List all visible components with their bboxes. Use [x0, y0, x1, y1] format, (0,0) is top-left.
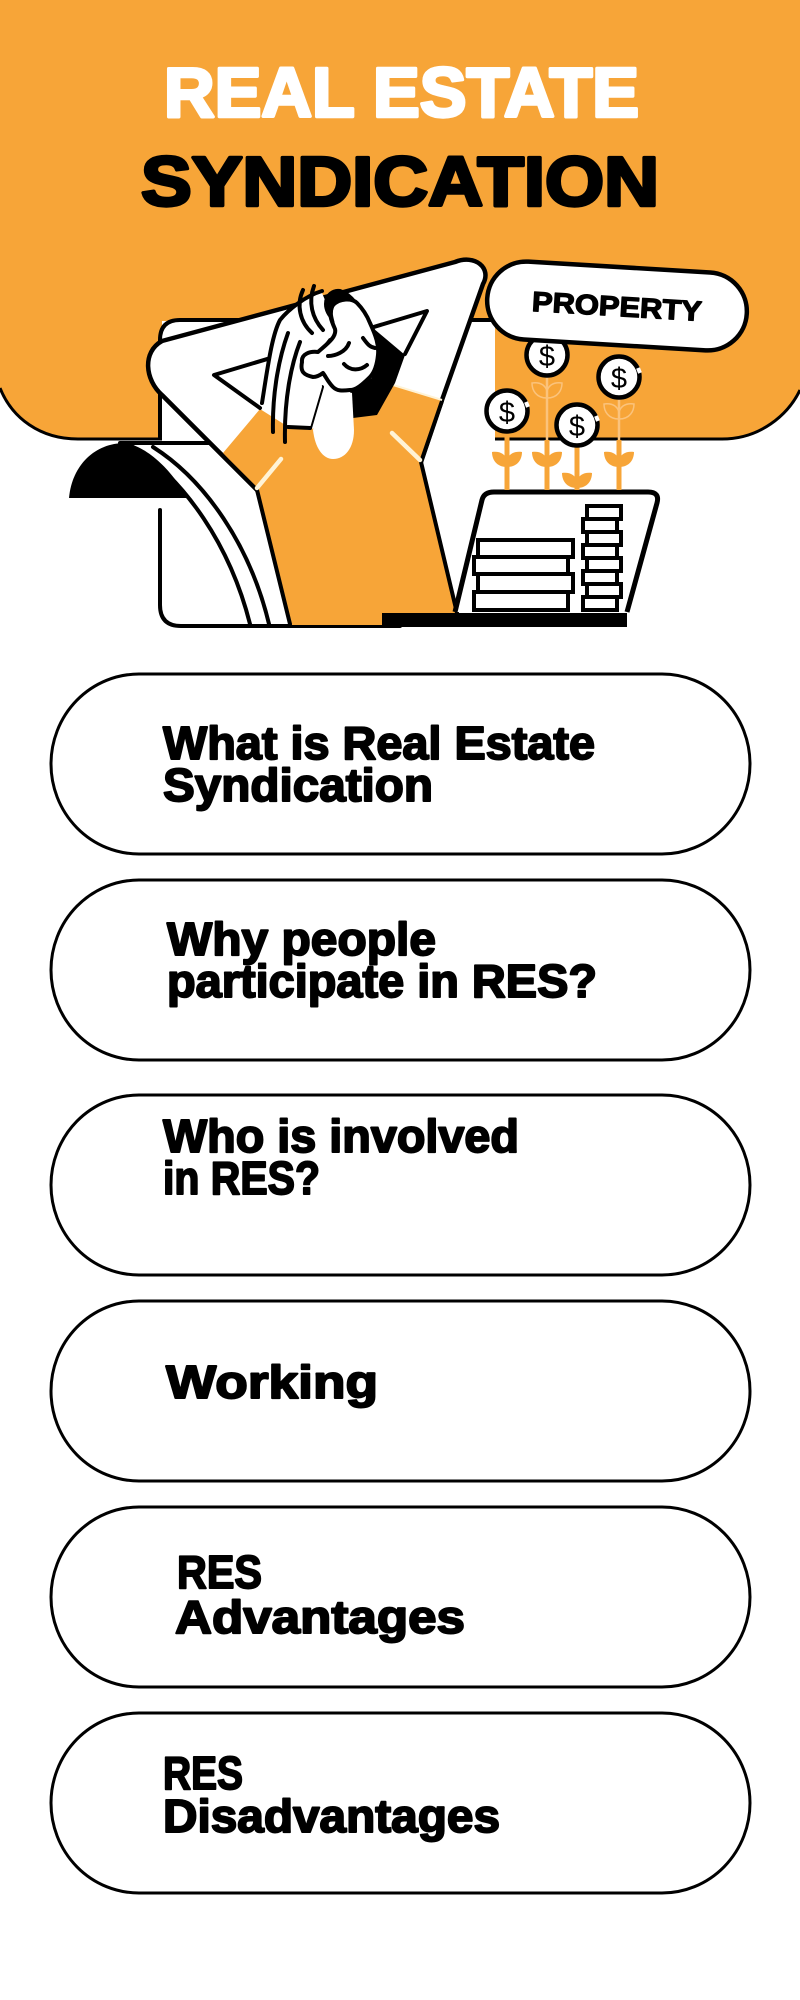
property badge: PROPERTY — [531, 286, 703, 327]
pill: why people participate: participate in RES? — [167, 955, 597, 1007]
inner arm triangle — [214, 311, 427, 408]
pill: res disadvantages — [51, 1713, 750, 1893]
pill: working: Working — [166, 1356, 378, 1408]
pill: res advantages: Advantages — [175, 1591, 465, 1643]
hair strands — [262, 293, 333, 428]
shirt creases — [257, 433, 420, 488]
chair back — [160, 320, 495, 626]
title: real estate: REAL ESTATE — [164, 54, 639, 132]
coin stack large — [474, 540, 573, 610]
chair arm — [69, 443, 269, 624]
head and face — [301, 299, 378, 391]
pill: who is involved — [51, 1095, 750, 1275]
coins with dollar signs — [486, 334, 640, 446]
title: syndication: SYNDICATION — [141, 142, 659, 220]
laptop — [382, 492, 658, 627]
coins with dollar signs: $ — [539, 341, 555, 373]
coin stack small — [583, 506, 621, 610]
pill: what is real estate syndication: Syndication — [163, 759, 433, 811]
arms — [148, 260, 485, 490]
pill: who is involved: in RES? — [163, 1152, 320, 1204]
pill: what is real estate syndication: What is Real Estate — [163, 717, 595, 769]
property badge — [485, 259, 749, 353]
person — [148, 260, 485, 625]
pill: res advantages — [51, 1507, 750, 1687]
coins with dollar signs: $ — [611, 363, 627, 395]
pill: res disadvantages: RES — [163, 1747, 243, 1799]
money plants — [492, 376, 634, 490]
pill: res advantages: RES — [177, 1546, 262, 1598]
shirt — [223, 385, 457, 625]
neck — [313, 385, 354, 459]
header background — [0, 0, 800, 439]
pill: res disadvantages: Disadvantages — [163, 1790, 500, 1842]
pill: what is real estate syndication — [51, 674, 750, 854]
coins with dollar signs: $ — [499, 397, 515, 429]
pill: working — [51, 1301, 750, 1481]
illustration: person relaxing in chair with money plants — [69, 260, 658, 627]
pill: why people participate — [51, 880, 750, 1060]
pill: who is involved: Who is involved — [163, 1110, 519, 1162]
pill: why people participate: Why people — [167, 913, 436, 965]
coins with dollar signs: $ — [569, 411, 585, 443]
black hair behind head — [350, 328, 405, 418]
hair top — [325, 290, 356, 320]
